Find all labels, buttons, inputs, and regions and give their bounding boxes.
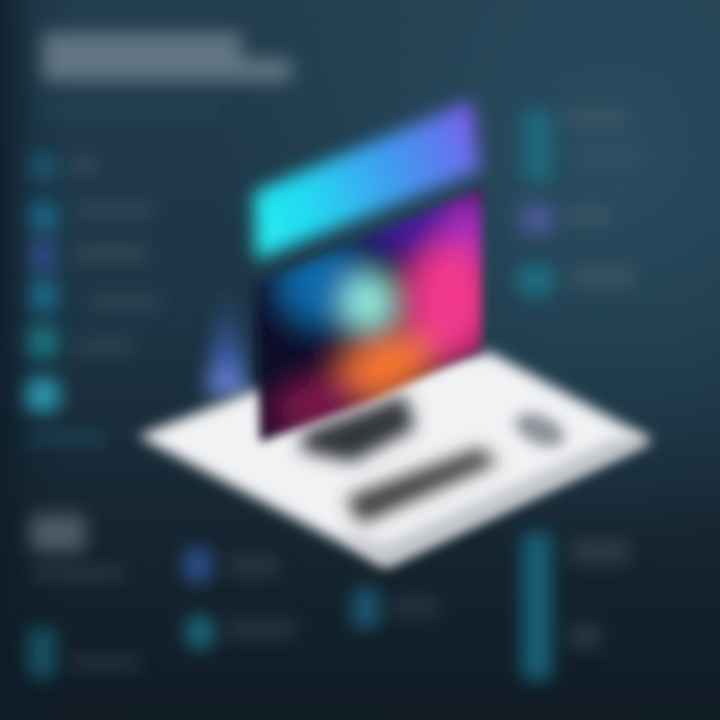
- icon: mouse: [511, 407, 569, 453]
- text block: stat caption: [34, 566, 124, 580]
- title: [36, 32, 292, 116]
- icon: left list icons: [26, 153, 60, 412]
- screen base: [250, 186, 486, 448]
- text block: bottom left label: [70, 656, 140, 670]
- text block: right list labels: [566, 110, 646, 286]
- panel: left feature list: [26, 153, 160, 444]
- icon: keyboard: [346, 448, 498, 524]
- text block: bottom right labels: [570, 540, 630, 648]
- illustration: isometric computer: [138, 100, 652, 566]
- stat figure: [30, 514, 86, 552]
- text block: bottom centre labels: [226, 556, 438, 638]
- white platform: [138, 352, 652, 566]
- panel: bottom centre items: [184, 548, 438, 648]
- monitor stand: [300, 395, 415, 462]
- blue glow spike: [206, 285, 248, 395]
- panel: bottom right items: [522, 532, 630, 680]
- monitor screen: [250, 185, 490, 448]
- icon: right list icons: [518, 110, 554, 296]
- text block: left list labels: [70, 158, 160, 352]
- platform lower-edge shading: [340, 436, 652, 566]
- top gradient panel: [254, 100, 480, 260]
- screen colour bloom: [365, 191, 485, 259]
- text block: left caption: [30, 432, 106, 444]
- panel: right feature list: [518, 110, 646, 296]
- icon: bottom centre icons: [184, 548, 380, 648]
- icon: bottom left icon: [28, 628, 56, 678]
- panel: bottom left stat: [28, 514, 140, 678]
- icon: bottom right icons: [522, 532, 552, 680]
